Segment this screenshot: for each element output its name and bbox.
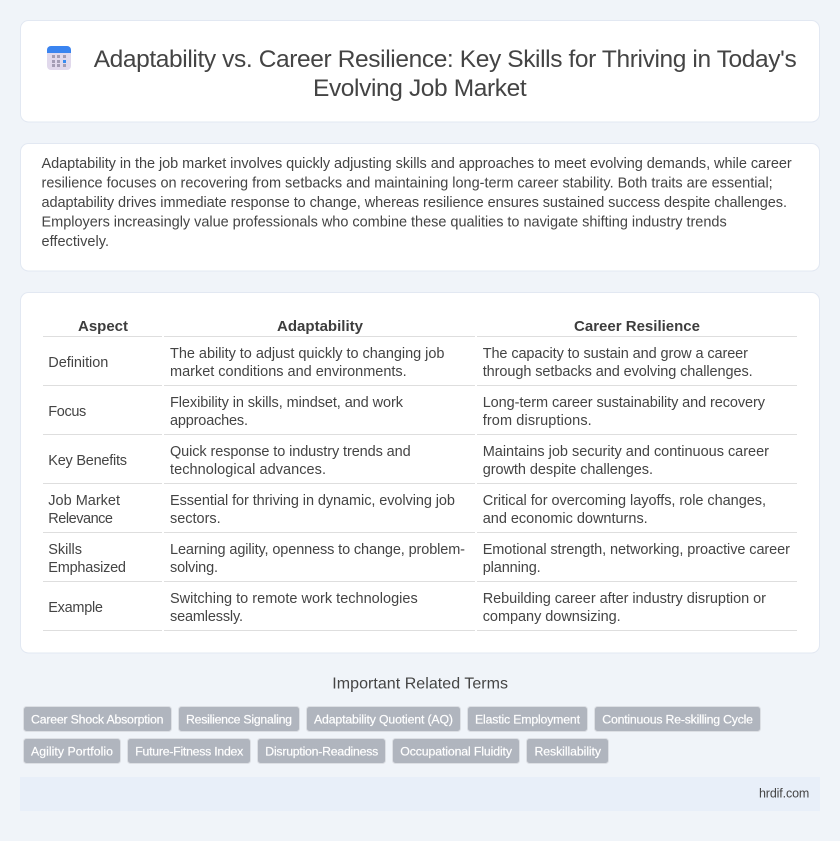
related term tags: [24, 706, 760, 764]
row: example: [48, 591, 766, 625]
text block: introduction paragraph: effectively.: [42, 234, 109, 250]
row: key benefits: [48, 444, 769, 478]
text block: introduction paragraph: adaptability drives immediate response to change, whereas resilience ensures sustained success despite challenges.: [42, 195, 787, 211]
tag: resilience signaling: Resilience Signaling: [186, 712, 292, 726]
row: job market relevance: Relevance: [48, 511, 113, 527]
footer bar: [20, 777, 820, 811]
row: focus: approaches.: [170, 413, 248, 429]
row: definition: The ability to adjust quickly to changing job: [170, 346, 444, 362]
tag: elastic employment: [468, 706, 588, 732]
row: example: seamlessly.: [170, 609, 243, 625]
row: skills emphasized: Skills: [48, 542, 82, 558]
panel: introduction: [20, 144, 820, 271]
title: Adaptability vs. Career Resilience: Key Skills for Thriving in Today's: [94, 46, 797, 73]
table header row: [78, 318, 700, 335]
row: definition: through setbacks and evolving challenges.: [483, 364, 753, 380]
tag: adaptability quotient: [306, 706, 460, 732]
row: key benefits: Quick response to industry trends and: [170, 444, 411, 460]
heading: important related terms: Important Related Terms: [332, 676, 508, 693]
tag: continuous re-skilling cycle: Continuous Re-skilling Cycle: [602, 712, 753, 726]
row: job market relevance: [48, 493, 766, 527]
tag: elastic employment: Elastic Employment: [475, 712, 581, 726]
row: example: Switching to remote work technologies: [170, 591, 418, 607]
row: focus: Long-term career sustainability and recovery: [483, 395, 766, 411]
tag: occupational fluidity: Occupational Fluidity: [400, 744, 513, 758]
row: example: company downsizing.: [483, 609, 621, 625]
tag: resilience signaling: [178, 706, 300, 732]
text block: introduction paragraph: resilience focuses on recovering from setbacks and maintaining long-term career stability. Both traits are essential;: [42, 176, 773, 192]
tag: future-fitness index: [128, 738, 250, 764]
row: skills emphasized: solving.: [170, 560, 218, 576]
icon: calendar: [47, 46, 71, 70]
row: skills emphasized: Learning agility, openness to change, problem-: [170, 542, 465, 558]
row: focus: Flexibility in skills, mindset, and work: [170, 395, 404, 411]
row: skills emphasized: planning.: [483, 560, 541, 576]
row: job market relevance: Essential for thriving in dynamic, evolving job: [170, 493, 455, 509]
row: job market relevance: Job Market: [48, 493, 120, 509]
row: focus: [48, 395, 766, 429]
row: focus: Focus: [48, 404, 86, 420]
table header row: Career Resilience: [574, 318, 700, 335]
tag: continuous re-skilling cycle: [594, 706, 760, 732]
tag: reskillability: [526, 738, 608, 764]
tag: occupational fluidity: [392, 738, 520, 764]
row: key benefits: growth despite challenges.: [483, 462, 653, 478]
tag: disruption-readiness: [258, 738, 386, 764]
tag: career shock absorption: [24, 706, 172, 732]
row: focus: from disruptions.: [483, 413, 592, 429]
row: key benefits: Key Benefits: [48, 453, 127, 469]
panel: comparison table: [20, 292, 820, 653]
row: key benefits: technological advances.: [170, 462, 326, 478]
text block: introduction paragraph: Adaptability in the job market involves quickly adjusting skills and approaches to meet evolving demands, while career: [42, 156, 792, 172]
tag: agility portfolio: [24, 738, 120, 764]
title: [94, 46, 797, 102]
row: job market relevance: Critical for overcoming layoffs, role changes,: [483, 493, 766, 509]
text block: introduction paragraph: [42, 156, 792, 250]
tag: adaptability quotient: Adaptability Quotient (AQ): [314, 712, 453, 726]
title: Evolving Job Market: [313, 75, 527, 102]
footer: site credit: hrdif.com: [759, 787, 809, 801]
row: job market relevance: and economic downturns.: [483, 511, 648, 527]
tag: agility portfolio: Agility Portfolio: [31, 744, 113, 758]
tag: disruption-readiness: Disruption-Readiness: [265, 744, 378, 758]
row: definition: market conditions and environments.: [170, 364, 407, 380]
table header row: Adaptability: [277, 318, 364, 335]
row: skills emphasized: [48, 542, 790, 576]
row: definition: [48, 346, 753, 380]
row: key benefits: Maintains job security and continuous career: [483, 444, 769, 460]
tag: career shock absorption: Career Shock Absorption: [31, 712, 164, 726]
row: definition: The capacity to sustain and grow a career: [483, 346, 748, 362]
row: example: Example: [48, 600, 103, 616]
row: definition: Definition: [48, 355, 108, 371]
text block: introduction paragraph: Employers increasingly value professionals who combine these qualities to navigate shifting industry trends: [42, 214, 727, 230]
row: example: Rebuilding career after industry disruption or: [483, 591, 766, 607]
panel: page header: [20, 20, 820, 122]
row: skills emphasized: Emotional strength, networking, proactive career: [483, 542, 790, 558]
tag: reskillability: Reskillability: [534, 744, 602, 758]
tag: future-fitness index: Future-Fitness Index: [135, 744, 244, 758]
row: job market relevance: sectors.: [170, 511, 221, 527]
table header row: Aspect: [78, 318, 128, 335]
row: skills emphasized: Emphasized: [48, 560, 126, 576]
